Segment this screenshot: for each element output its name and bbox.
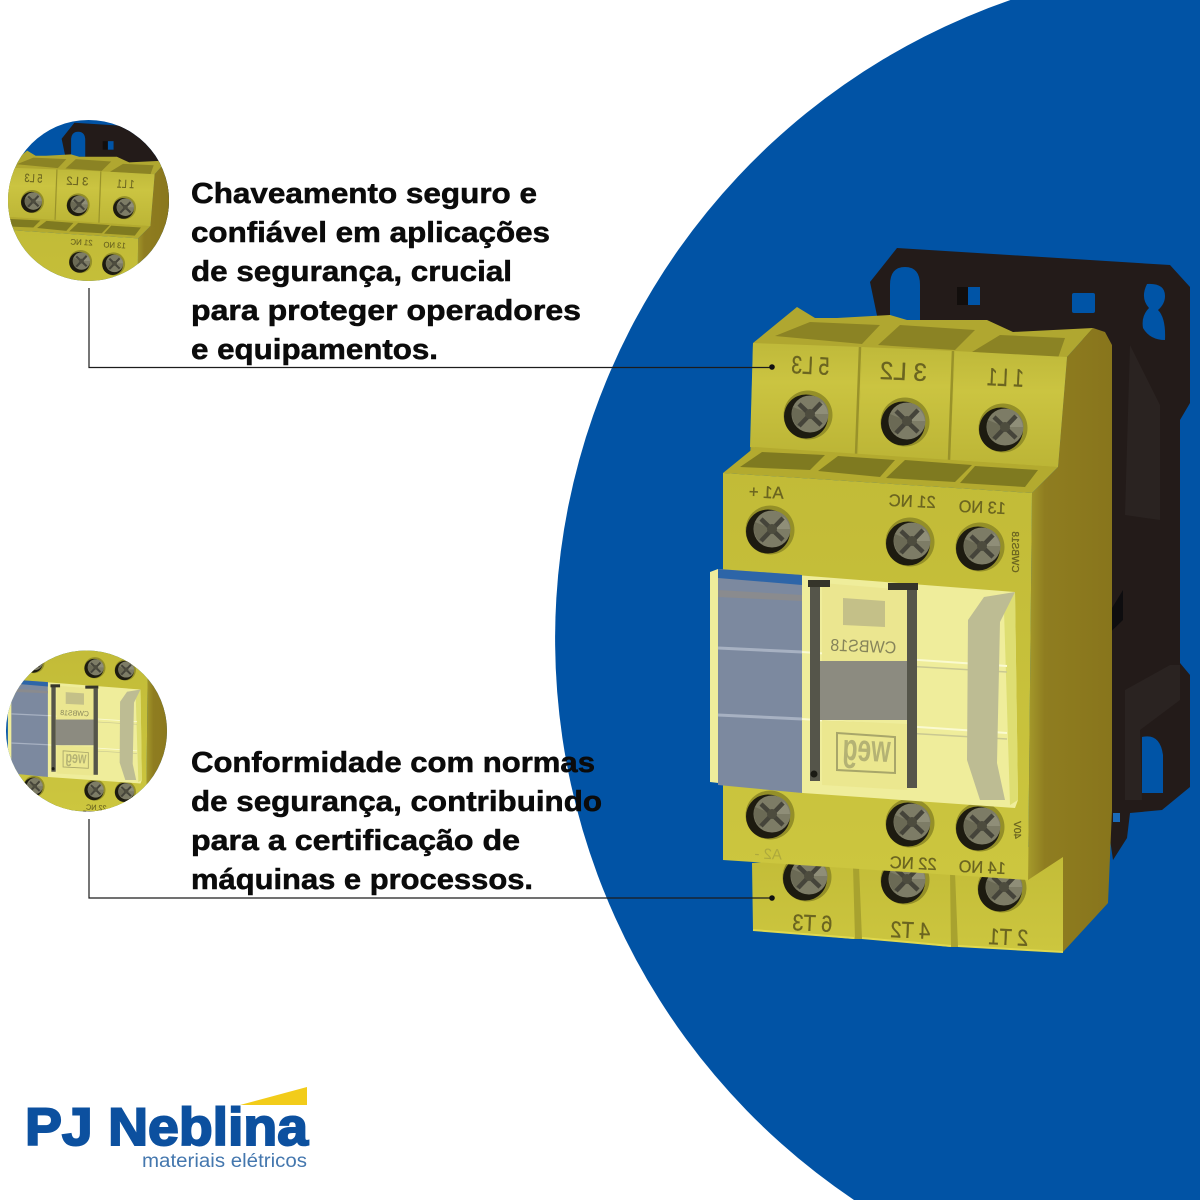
logo tagline: materiais elétricos — [142, 1151, 307, 1172]
terminal labels (mirrored) — [748, 351, 1029, 951]
terminal labels (mirrored): 14 NO — [958, 857, 1006, 878]
text block: safe switching: Chaveamento seguro e — [191, 178, 537, 210]
thumbnail: safety cover — [6, 650, 167, 812]
thumbnail: top terminals: 21 NC — [70, 238, 93, 247]
thumbnail: safety cover: weg — [65, 748, 87, 768]
text block: safe switching: para proteger operadores — [191, 295, 581, 327]
terminal labels (mirrored): weg — [842, 727, 892, 771]
connector line: bottom callout — [89, 819, 775, 901]
text block: safe switching: e equipamentos. — [191, 334, 438, 366]
thumbnail: top terminals: 1 L1 — [117, 177, 135, 191]
terminal labels (mirrored): 6 T3 — [792, 909, 833, 937]
text block: standards compliance — [191, 747, 602, 896]
text block: safe switching — [191, 178, 581, 366]
terminal labels (mirrored): 40V — [1011, 821, 1022, 839]
terminal labels (mirrored): A1 + — [748, 482, 784, 503]
thumbnail: top terminals: 3 L2 — [66, 174, 89, 189]
text block: standards compliance: para a certificação de — [191, 825, 520, 857]
logo: PJ Neblina — [25, 1087, 309, 1172]
thumbnail: safety cover: CWBS18 — [60, 708, 89, 718]
thumbnail: safety cover: 22 NC — [85, 803, 107, 812]
terminal labels (mirrored): CWBS18 — [1009, 531, 1020, 573]
thumbnail: top terminals: 5 L3 — [24, 171, 43, 186]
terminal labels (mirrored): 4 T2 — [890, 916, 931, 944]
terminal labels (mirrored): 2 T1 — [988, 923, 1029, 951]
thumbnail: top terminals: 13 NO — [103, 240, 126, 250]
text block: standards compliance: de segurança, contribuindo — [191, 786, 602, 818]
contactor product illustration — [710, 248, 1190, 952]
terminal labels (mirrored): 13 NO — [958, 497, 1006, 518]
terminal labels (mirrored): 21 NC — [888, 491, 936, 512]
connector line: top callout — [89, 288, 775, 370]
thumbnail: top terminals — [8, 120, 169, 281]
terminal labels (mirrored): 1 L1 — [986, 363, 1024, 393]
blue background circle — [555, 0, 1200, 1200]
text block: safe switching: confiável em aplicações — [191, 217, 550, 249]
text block: safe switching: de segurança, crucial — [191, 256, 512, 288]
terminal labels (mirrored): 5 L3 — [791, 351, 830, 381]
text block: standards compliance: Conformidade com normas — [191, 747, 595, 779]
terminal labels (mirrored): CWBS18 — [830, 636, 897, 657]
terminal labels (mirrored): 3 L2 — [879, 357, 927, 387]
terminal labels (mirrored): A2 - — [754, 845, 782, 864]
logo wordmark: PJ Neblina — [25, 1098, 309, 1157]
terminal labels (mirrored): 22 NC — [889, 853, 937, 874]
icon: yellow roof wedge — [240, 1087, 307, 1105]
text block: standards compliance: máquinas e processos. — [191, 864, 533, 896]
